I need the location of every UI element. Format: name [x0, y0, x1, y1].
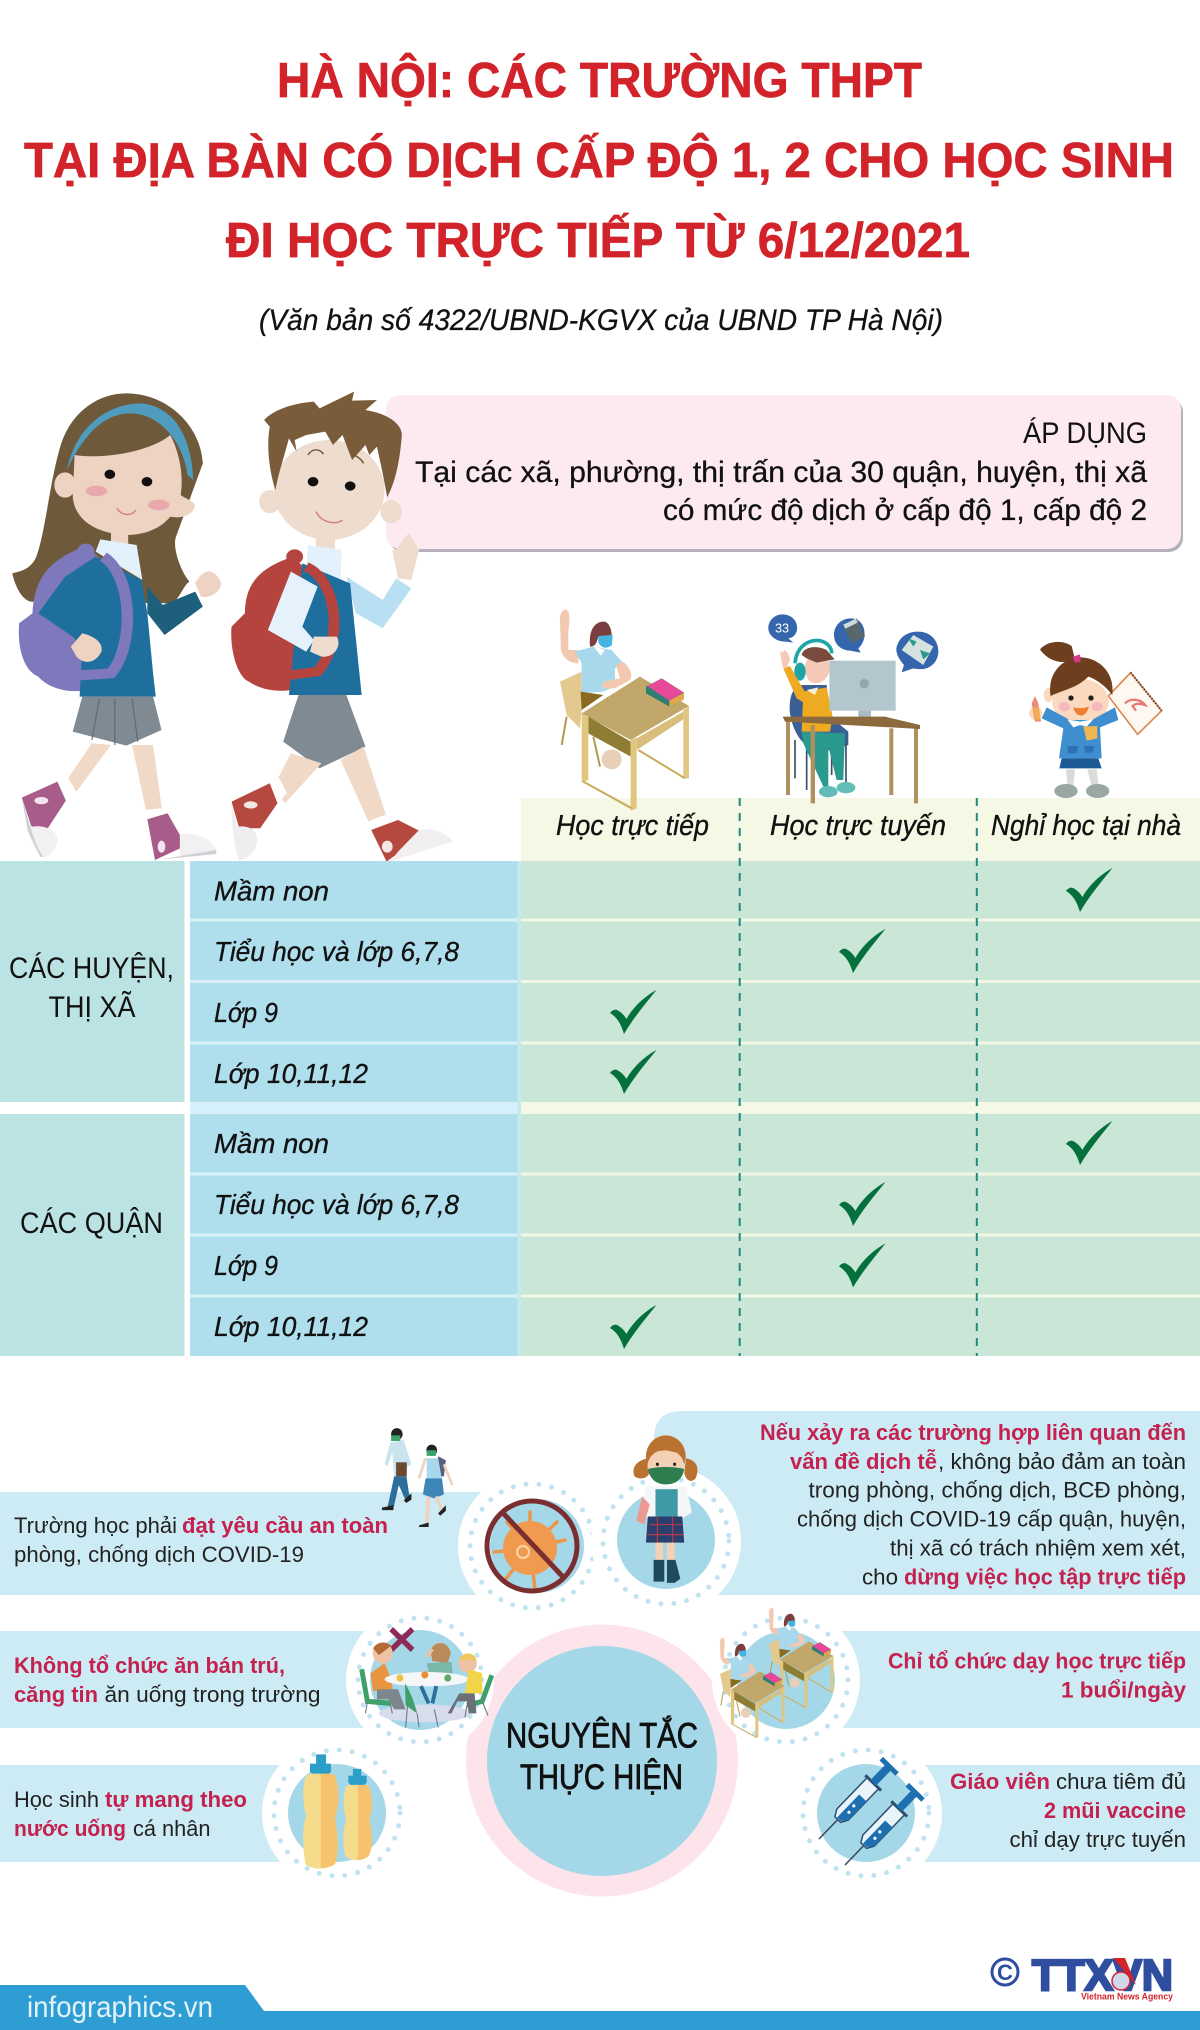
grade labels: Mầm non	[214, 876, 329, 906]
icon: student at classroom desk	[560, 610, 689, 811]
title: ĐI HỌC TRỰC TIẾP TỪ 6/12/2021	[226, 213, 970, 268]
principle band: safety requirement: phòng, chống dịch COVID-19	[14, 1542, 304, 1567]
check marks	[610, 868, 1112, 1349]
principle band: bring own water	[0, 1765, 337, 1862]
principle band: safety requirement: đạt yêu cầu an toàn	[182, 1513, 388, 1538]
principle band: epidemic case handling: , không bảo đảm an toàn	[938, 1449, 1186, 1474]
principle band: teachers vaccine: Giáo viên	[950, 1769, 1050, 1794]
principle band: one session a day: Chỉ tổ chức dạy học trực tiếp	[888, 1648, 1186, 1674]
principle band: no canteen: Không tổ chức ăn bán trú,	[14, 1653, 285, 1678]
title: HÀ NỘI: CÁC TRƯỜNG THPT	[277, 53, 922, 108]
group label: các huyện, thị xã: THỊ XÃ	[48, 990, 136, 1024]
icon: no virus	[458, 1472, 606, 1620]
footer bar	[0, 1985, 1200, 2030]
illustration: boy with backpack	[231, 392, 452, 862]
title	[24, 53, 1174, 268]
group label: các quận: CÁC QUẬN	[20, 1207, 163, 1240]
principle band: bring own water: Học sinh	[14, 1787, 99, 1812]
principle band: one session a day	[786, 1631, 1200, 1728]
principle band: epidemic case handling: cho	[862, 1564, 898, 1590]
grade labels: Tiểu học và lớp 6,7,8	[214, 936, 459, 967]
principle band: bring own water: tự mang theo	[105, 1787, 247, 1812]
grade labels: Lớp 9	[214, 1250, 278, 1281]
subtitle: (Văn bản số 4322/UBND-KGVX của UBND TP Hà Nội)	[259, 304, 943, 337]
principle band: epidemic case handling: dừng việc học tập trực tiếp	[904, 1564, 1186, 1590]
icon: water bottles	[262, 1738, 412, 1888]
grade labels: Lớp 9	[214, 997, 278, 1028]
panel: áp dụng: ÁP DỤNG	[1023, 417, 1147, 450]
column headers: Học trực tuyến	[770, 810, 946, 842]
principle band: safety requirement: Trường học phải	[14, 1513, 177, 1538]
central circle: nguyên tắc thực hiện	[466, 1624, 738, 1896]
title: TẠI ĐỊA BÀN CÓ DỊCH CẤP ĐỘ 1, 2 CHO HỌC SINH	[24, 133, 1174, 188]
principle band: teachers vaccine	[866, 1765, 1200, 1862]
panel: áp dụng	[386, 395, 1183, 552]
column headers	[556, 810, 1181, 842]
row labels background	[190, 861, 522, 1356]
principle band: epidemic case handling: vấn đề dịch tễ	[790, 1449, 937, 1474]
panel: áp dụng: Tại các xã, phường, thị trấn của 30 quận, huyện, thị xã	[415, 456, 1147, 489]
grade labels: Mầm non	[214, 1128, 329, 1159]
column headers: Học trực tiếp	[556, 810, 709, 842]
group label: các huyện, thị xã	[9, 952, 174, 1024]
grade labels: Lớp 10,11,12	[214, 1311, 368, 1342]
panel: áp dụng: có mức độ dịch ở cấp độ 1, cấp độ 2	[663, 494, 1147, 527]
principle band: epidemic case handling: trong phòng, chống dịch, BCĐ phòng,	[808, 1478, 1186, 1502]
principle band: one session a day: 1 buổi/ngày	[1061, 1678, 1187, 1702]
icon: students walking	[382, 1428, 452, 1527]
footer bar: infographics.vn	[27, 1991, 213, 2024]
icon: two students at desks	[712, 1606, 860, 1754]
icon: child at home	[1029, 642, 1162, 798]
principle band: bring own water: nước uống	[14, 1816, 126, 1841]
grade labels: Lớp 10,11,12	[214, 1058, 368, 1089]
table	[0, 798, 1200, 1356]
principle band: teachers vaccine: 2 mũi vaccine	[1044, 1798, 1186, 1823]
principle band: epidemic case handling: Nếu xảy ra các trường hợp liên quan đến	[760, 1420, 1186, 1445]
table header background	[521, 798, 1200, 861]
icon: student learning online	[768, 614, 938, 803]
principle band: epidemic case handling: chống dịch COVID-19 cấp quận, huyện,	[797, 1506, 1186, 1532]
principle band: safety requirement	[0, 1492, 520, 1595]
icon: vaccine syringes	[790, 1737, 942, 1889]
group label: các huyện, thị xã: CÁC HUYỆN,	[9, 952, 174, 985]
column headers: Nghỉ học tại nhà	[991, 810, 1181, 842]
principle band: bring own water: cá nhân	[133, 1816, 210, 1841]
principle band: teachers vaccine: chưa tiêm đủ	[1056, 1769, 1186, 1794]
principle band: teachers vaccine: chỉ dạy trực tuyến	[1010, 1827, 1186, 1852]
logo: TTXVN: TTXVN	[1032, 1951, 1173, 2000]
principle band: no canteen: căng tin	[14, 1682, 98, 1707]
icon: canteen table	[346, 1606, 494, 1754]
illustration: girl with backpack	[12, 393, 221, 861]
grade labels: Tiểu học và lớp 6,7,8	[214, 1189, 459, 1220]
central circle: nguyên tắc thực hiện: NGUYÊN TẮC	[506, 1716, 698, 1756]
principle band: epidemic case handling: thị xã có trách nhiệm xem xét,	[890, 1536, 1186, 1560]
central circle: nguyên tắc thực hiện: THỰC HIỆN	[520, 1758, 683, 1797]
icon: girl with mask	[591, 1435, 741, 1616]
grade labels	[214, 876, 459, 1342]
principle band: epidemic case handling	[654, 1411, 1200, 1595]
principle band: no canteen	[0, 1631, 420, 1728]
logo: TTXVN: C	[997, 1960, 1013, 1985]
row group labels background	[0, 861, 184, 1356]
logo: TTXVN: Vietnam News Agency	[1081, 1992, 1173, 2002]
icon: student learning online: 33	[775, 622, 789, 636]
green grid	[521, 861, 1200, 1356]
principle band: no canteen: ăn uống trong trường	[104, 1682, 320, 1707]
